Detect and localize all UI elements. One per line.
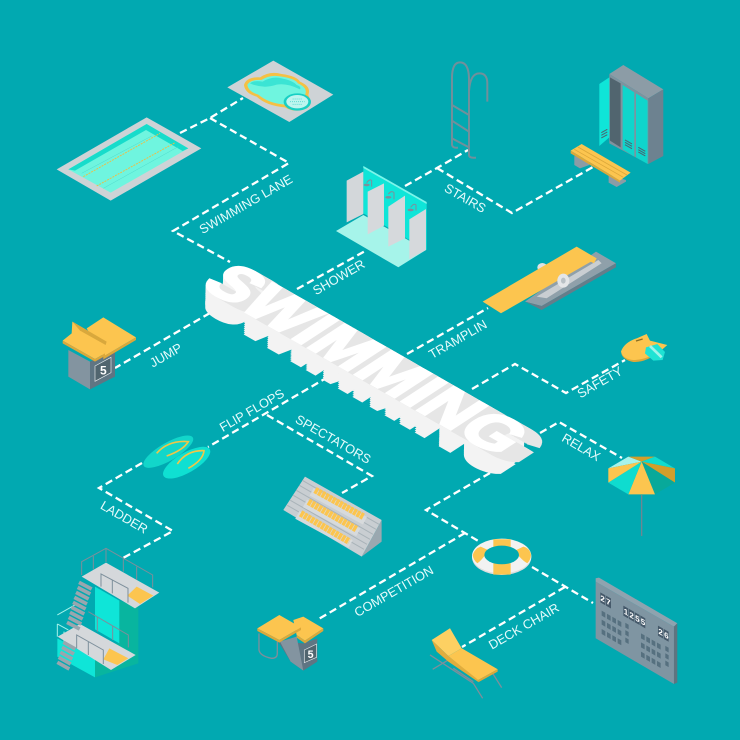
icon: jump starting block [63, 317, 136, 389]
icon: competition starting block [257, 615, 323, 671]
icon: jump starting block: 5 [100, 364, 107, 378]
label: relax: RELAX [559, 430, 604, 464]
icon: lockers [599, 65, 663, 164]
label: jump: JUMP [147, 340, 185, 370]
label: flip flops: FLIP FLOPS [217, 386, 287, 435]
icon: shower cabins [336, 166, 427, 267]
title: SWIMMING 3D lettering: SWIMMING [188, 256, 545, 466]
icon: competition starting block: 5 [308, 649, 314, 661]
title: SWIMMING 3D lettering: SWIMMING [187, 254, 545, 464]
title: SWIMMING 3D lettering: SWIMMING [187, 276, 545, 486]
icon: scoreboard: 1 [624, 606, 628, 618]
icon: scoreboard: 2 [600, 593, 605, 605]
label: tramplin: TRAMPLIN [426, 316, 490, 362]
title: SWIMMING 3D lettering: SWIMMING [187, 258, 545, 468]
label: spectators: SPECTATORS [293, 411, 374, 467]
icon: scoreboard: 2 [629, 609, 634, 621]
label: ladder: LADDER [98, 498, 150, 537]
icon: scoreboard: 6 [664, 629, 669, 641]
icon: leisure pool with hot tub [227, 61, 333, 122]
title: SWIMMING 3D lettering: SWIMMING [187, 264, 545, 474]
title: SWIMMING 3D lettering: SWIMMING [187, 270, 545, 480]
title: SWIMMING 3D lettering: SWIMMING [202, 263, 559, 472]
icon: springboard tramplin [483, 247, 616, 313]
title: SWIMMING 3D lettering: SWIMMING [187, 272, 545, 482]
icon: scoreboard [596, 578, 677, 684]
label: safety: SAFETY [574, 363, 625, 401]
title: SWIMMING 3D lettering: SWIMMING [187, 268, 545, 478]
label: competition: COMPETITION [352, 562, 436, 620]
icon: diving tower ladder [57, 548, 159, 677]
label: swimming lane: SWIMMING LANE [196, 171, 295, 237]
icon: lifebuoy ring [472, 539, 531, 575]
icon: scoreboard: 7 [606, 596, 611, 608]
icon: scoreboard: 2 [658, 626, 663, 638]
label: shower: SHOWER [310, 256, 367, 298]
title: SWIMMING 3D lettering: SWIMMING [187, 260, 545, 470]
title: SWIMMING 3D lettering: SWIMMING [199, 261, 556, 471]
icon: scoreboard: 5 [635, 613, 640, 625]
label: stairs: STAIRS [442, 180, 489, 216]
title: SWIMMING 3D lettering: SWIMMING [197, 260, 555, 470]
title: SWIMMING 3D lettering: SWIMMING [187, 266, 545, 476]
title: SWIMMING 3D lettering: SWIMMING [189, 255, 547, 465]
title: SWIMMING 3D lettering: SWIMMING [205, 265, 563, 474]
label: deck chair: DECK CHAIR [486, 600, 562, 652]
title: SWIMMING 3D lettering: SWIMMING [187, 274, 545, 484]
icon: flip flops [139, 430, 215, 485]
icon: deck chair [430, 628, 502, 698]
icon: spectator stands [283, 477, 382, 557]
title: SWIMMING 3D lettering: SWIMMING [204, 264, 561, 473]
icon: pool ladder stairs [452, 62, 487, 158]
icon: beach umbrella [608, 457, 675, 536]
title: SWIMMING 3D lettering: SWIMMING [196, 259, 553, 469]
title: SWIMMING 3D lettering: SWIMMING [192, 257, 550, 467]
title: SWIMMING 3D lettering: SWIMMING [187, 262, 545, 472]
title: SWIMMING 3D lettering: SWIMMING [191, 256, 548, 466]
title: SWIMMING 3D lettering: SWIMMING [200, 262, 558, 471]
icon: bench [571, 144, 631, 187]
icon: scoreboard: 5 [641, 616, 645, 628]
title: SWIMMING 3D lettering: SWIMMING [194, 258, 551, 468]
icon: swimming pool with lanes [57, 117, 201, 201]
icon: safety kickboard and goggles [621, 334, 667, 362]
connector lines [99, 98, 625, 647]
